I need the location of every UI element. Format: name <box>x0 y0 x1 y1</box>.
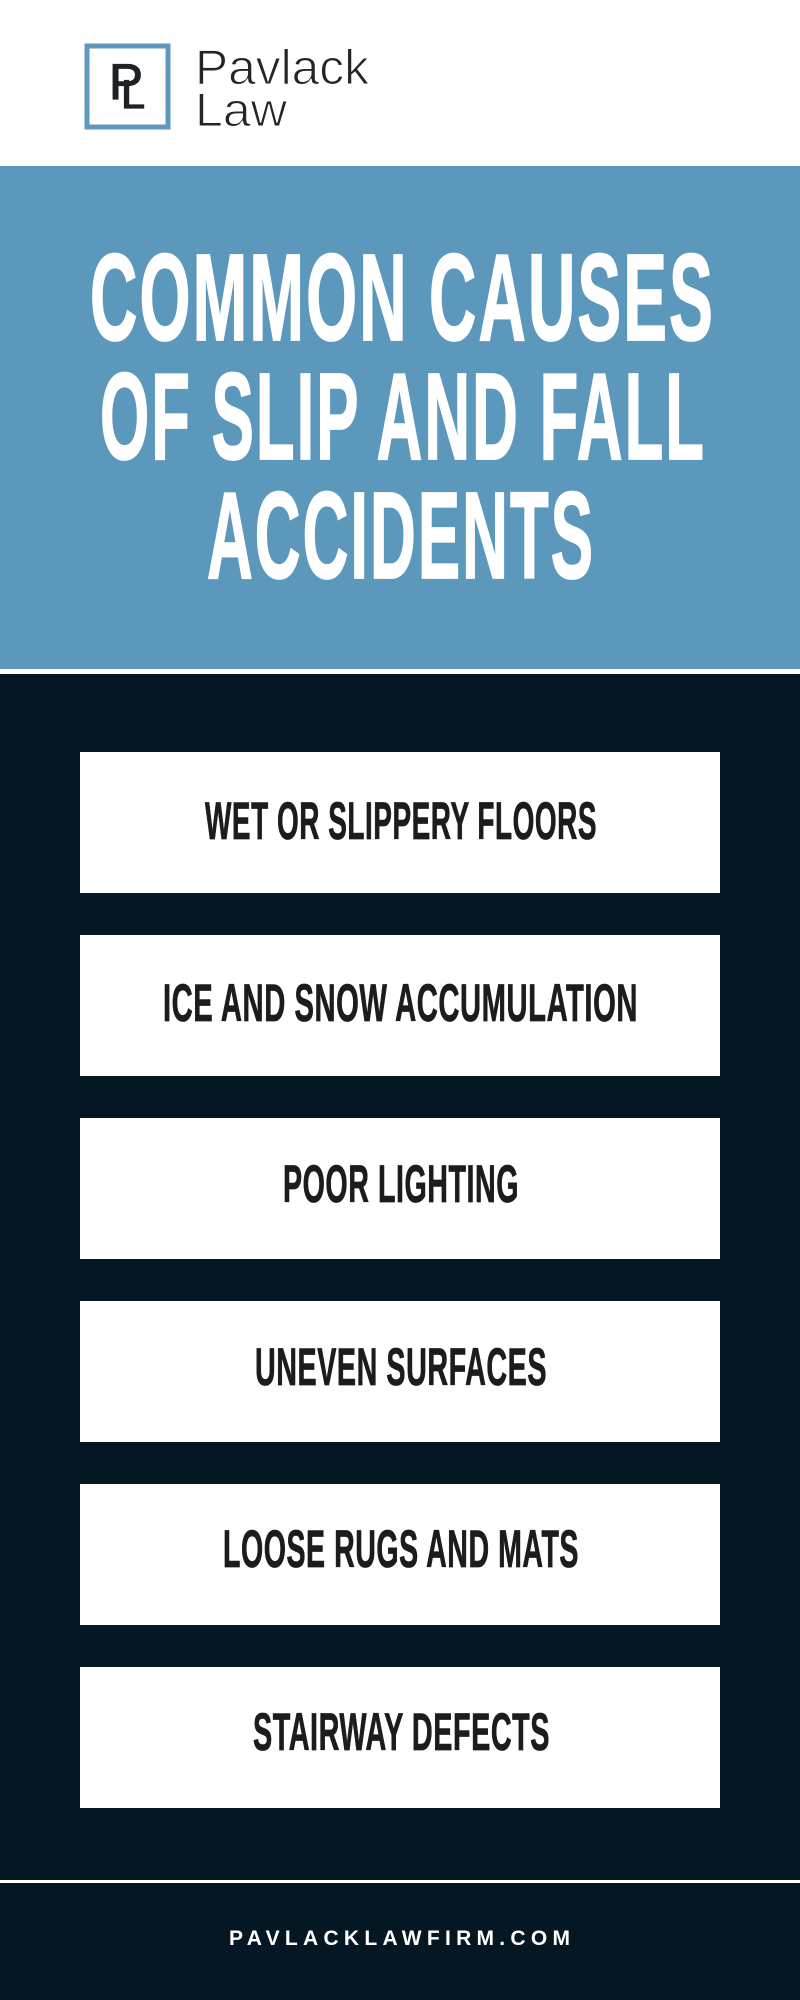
card: uneven surfaces <box>80 1301 720 1442</box>
card: stairway defects: STAIRWAY DEFECTS <box>253 1703 550 1762</box>
icon: PL monogram: L <box>121 73 145 117</box>
card: ice and snow accumulation <box>80 935 720 1076</box>
divider under title <box>0 669 800 674</box>
logo wordmark: Pavlack <box>195 41 370 95</box>
logo: Pavlack Law <box>87 41 370 136</box>
panel: causes list <box>0 674 800 2000</box>
card: poor lighting <box>80 1118 720 1259</box>
footer: website: PAVLACKLAWFIRM.COM <box>229 1927 570 1950</box>
card: poor lighting: POOR LIGHTING <box>283 1155 519 1214</box>
panel: title band <box>0 166 800 669</box>
card: wet or slippery floors <box>80 752 720 893</box>
header: logo band <box>0 0 800 166</box>
divider above footer <box>0 1880 800 1883</box>
logo wordmark <box>195 41 370 136</box>
title <box>90 230 715 605</box>
card: stairway defects <box>80 1667 720 1808</box>
icon: PL monogram: P <box>109 54 143 110</box>
card: loose rugs and mats <box>80 1484 720 1625</box>
card: uneven surfaces: UNEVEN SURFACES <box>255 1338 547 1397</box>
icon: PL monogram <box>87 46 168 127</box>
logo wordmark: Law <box>195 83 288 136</box>
